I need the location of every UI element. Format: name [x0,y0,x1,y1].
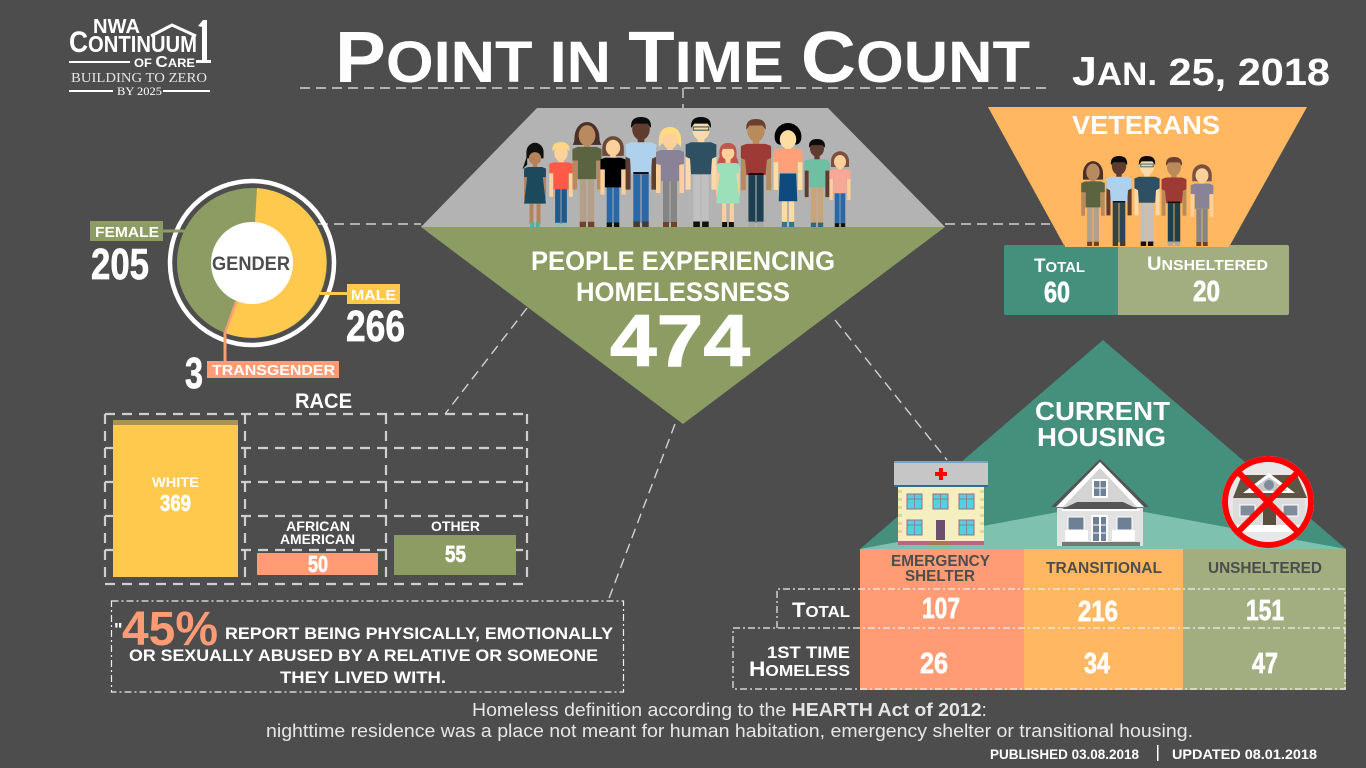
transgender label: TRANSGENDER [212,362,335,379]
teal roof [860,340,1346,549]
housing table: HOMELESS [749,658,850,681]
publication dates [990,745,1317,762]
female label: 205 [91,240,149,289]
housing table: EMERGENCY [891,553,990,570]
figure: veteran man 1 [1106,156,1132,246]
green triangle [421,227,945,424]
icon: transitional house [1051,459,1149,546]
veterans table: UNSHELTERED [1147,254,1268,275]
veterans table: 20 [1193,276,1220,308]
housing table: 1ST TIME [767,643,850,662]
title: POINT IN TIME COUNT [335,18,1030,98]
figure: veteran woman 2 [1191,164,1213,246]
heading: HOMELESSNESS [576,277,790,307]
housing table [733,549,1346,690]
housing table: SHELTER [905,568,975,585]
housing table: 47 [1252,648,1278,680]
bar: white [113,420,238,577]
housing table: TOTAL [792,599,850,622]
callout: 45 percent quote: THEY LIVED WITH. [280,668,446,687]
logo: NWA Continuum of Care: NWA [93,16,140,38]
heading: RACE [295,390,352,413]
bar: white: 369 [160,490,191,516]
logo: NWA Continuum of Care: OF CARE [134,54,195,71]
transgender label: 3 [185,349,203,398]
publication dates: UPDATED 08.01.2018 [1172,746,1317,762]
female label [90,221,187,289]
bar: other [394,519,516,575]
figure: woman 3 [656,127,684,227]
female label: FEMALE [95,224,159,241]
footnote: homeless definition [266,700,1193,741]
logo: NWA Continuum of Care: CONTINUUM [69,26,197,59]
heading: HOUSING [1037,422,1166,452]
logo: NWA Continuum of Care: BUILDING TO ZERO [71,71,207,86]
veterans table: 60 [1044,277,1070,309]
housing table: UNSHELTERED [1208,560,1322,577]
figure: girl 3 [830,151,850,227]
footnote: homeless definition: Homeless definition according to the HEARTH Act of 2012 : [472,700,987,720]
figure: veteran woman [1081,161,1105,246]
people illustration [523,117,850,227]
icon: crossed-out house [1222,456,1314,548]
heading: PEOPLE EXPERIENCING [531,246,835,276]
bar: white: WHITE [152,475,199,490]
chart: gender donut [90,181,405,398]
bar: other: OTHER [431,519,480,534]
figure: woman 2 [600,136,626,227]
housing table: TRANSITIONAL [1046,560,1162,577]
logo: NWA Continuum of Care [69,16,211,98]
housing table: 26 [920,648,948,680]
housing table: 34 [1084,648,1110,680]
figure: man 3 [741,119,771,227]
panel: people experiencing homelessness [421,108,945,424]
figure: veteran man 2 [1134,156,1160,246]
logo: NWA Continuum of Care: BY 2025 [117,84,162,98]
icon: emergency shelter building [894,461,988,545]
light hill [860,505,1346,549]
chart: gender donut: GENDER [212,254,290,275]
figure: veteran man 3 [1162,157,1186,246]
grey trapezoid [421,108,945,227]
male label [320,284,405,351]
orange funnel [988,107,1307,247]
callout: 45 percent quote: " [114,620,123,640]
bar: african american: AMERICAN [280,532,355,547]
heading: CURRENT [1035,396,1170,426]
transgender label [185,332,339,398]
total number: 474 [610,301,750,382]
callout: 45 percent quote: REPORT BEING PHYSICALLY, EMOTIONALLY [225,624,614,643]
callout: 45 percent quote: OR SEXUALLY ABUSED BY A RELATIVE OR SOMEONE [129,646,598,665]
heading [531,246,835,307]
figure: girl 1 [523,143,546,227]
bar: african american: 50 [308,551,328,577]
figure: girl 2 [716,143,740,227]
bar: other: 55 [445,541,466,567]
connector lines [300,88,1050,601]
callout: 45 percent quote: 45% [122,603,218,656]
panel: veterans [988,107,1307,315]
figure: boy 2 [805,139,829,227]
male label: MALE [351,287,396,304]
footnote: homeless definition: nighttime residence was a place not meant for human habitation, emergency shelter or transitional housing. [266,721,1193,741]
housing table: 216 [1078,596,1118,628]
veterans people illustration [1081,156,1213,246]
male label: 266 [346,302,405,351]
figure: woman 1 [572,122,602,227]
figure: man 1 [626,117,656,227]
housing table: 151 [1246,595,1284,627]
veterans table [1004,244,1289,315]
veterans table: TOTAL [1034,256,1085,277]
figure: woman 4 [774,123,802,227]
figure: man 2 [686,117,716,227]
heading: VETERANS [1072,110,1220,140]
chart: race bars [105,390,527,584]
publication dates: PUBLISHED 03.08.2018 [990,746,1139,762]
figure: boy 1 [549,142,573,227]
housing table: 107 [922,593,960,625]
callout: 45 percent quote [112,601,624,692]
panel: current housing [733,340,1346,690]
bar: african american [257,519,378,577]
date: JAN. 25, 2018 [1072,48,1330,94]
heading [1035,396,1170,452]
bar: african american: AFRICAN [286,519,350,534]
